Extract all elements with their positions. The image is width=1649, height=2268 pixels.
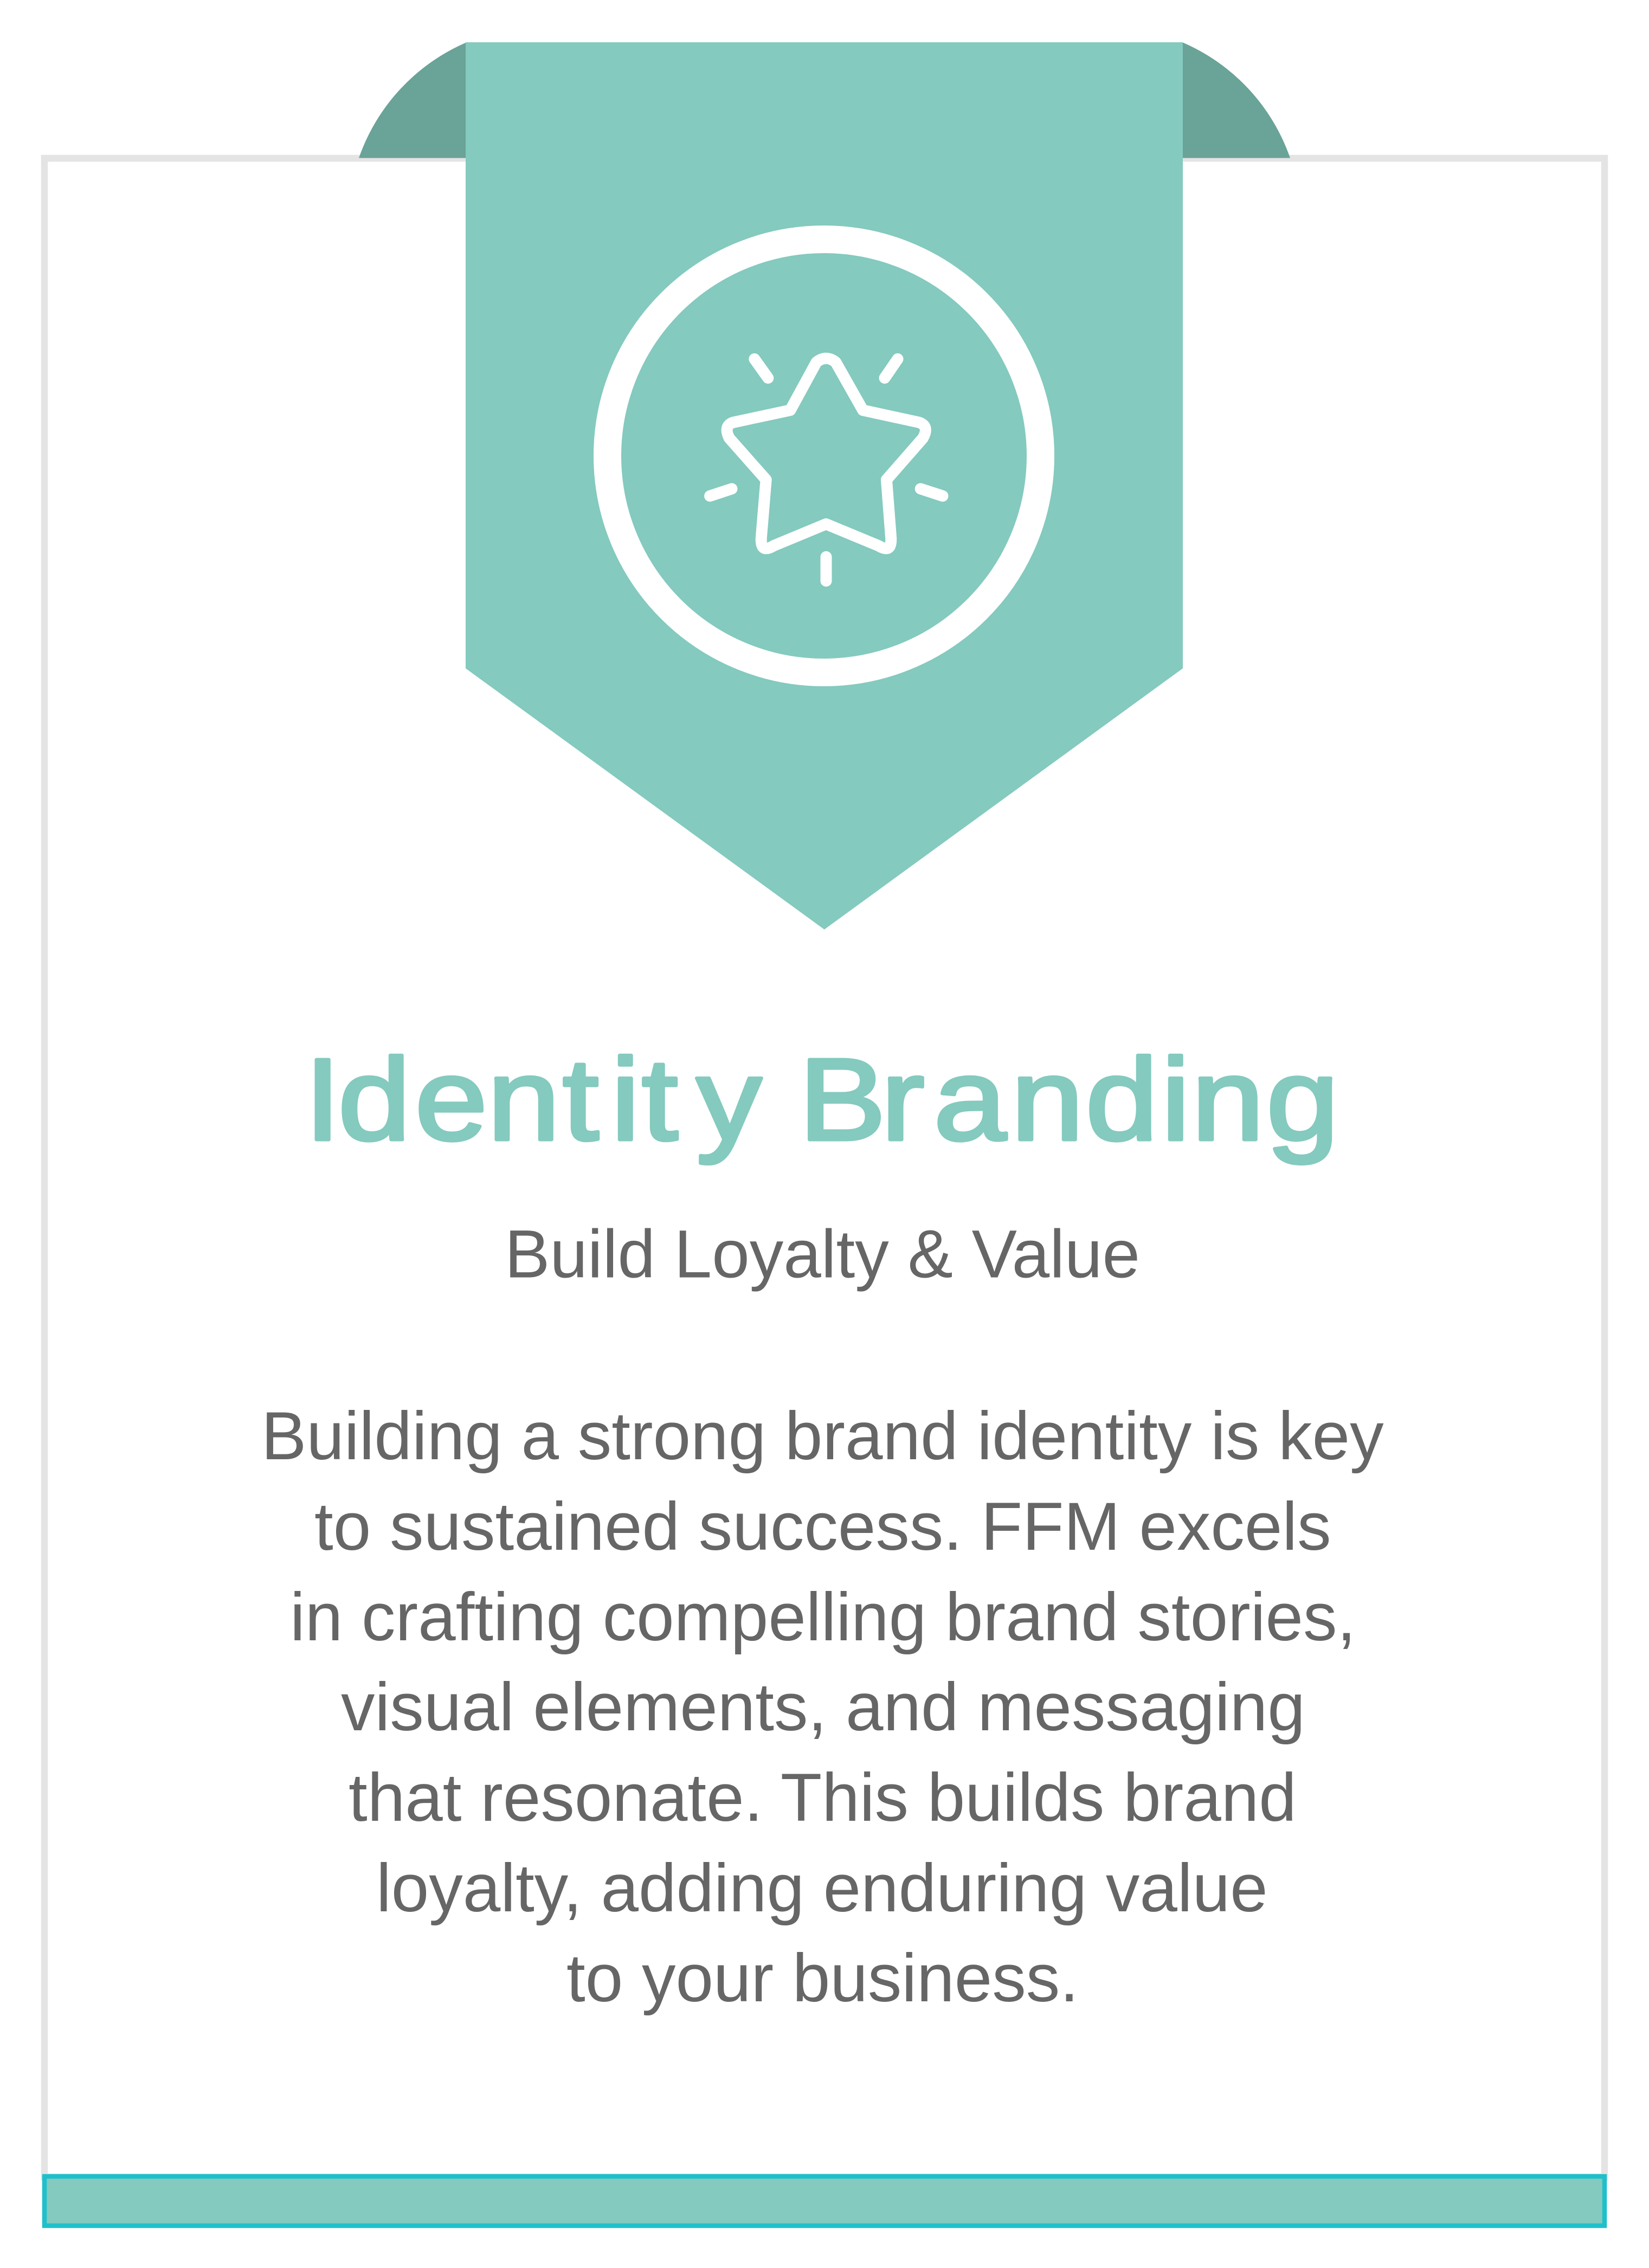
star rays (710, 359, 943, 581)
footer bar (44, 2176, 1605, 2226)
subtitle: Build Loyalty & Value (505, 1216, 1140, 1292)
body text: to your business. (566, 1941, 1079, 2016)
icon: white ring (607, 240, 1041, 672)
icon: shining star (710, 358, 943, 581)
body text: visual elements, and messaging (341, 1670, 1305, 1745)
title: Identity Branding (305, 1034, 1339, 1165)
ribbon fold: dark arc behind banner (359, 42, 1290, 158)
banner: teal pennant (466, 42, 1183, 930)
body text: Building a strong brand identity is key (261, 1399, 1384, 1474)
body text: that resonate. This builds brand (349, 1760, 1297, 1835)
body text: to sustained success. FFM excels (314, 1489, 1331, 1564)
body text: loyalty, adding enduring value (376, 1851, 1268, 1926)
body text (261, 1399, 1384, 2016)
body text: in crafting compelling brand stories, (290, 1580, 1356, 1655)
star outline (727, 358, 925, 549)
